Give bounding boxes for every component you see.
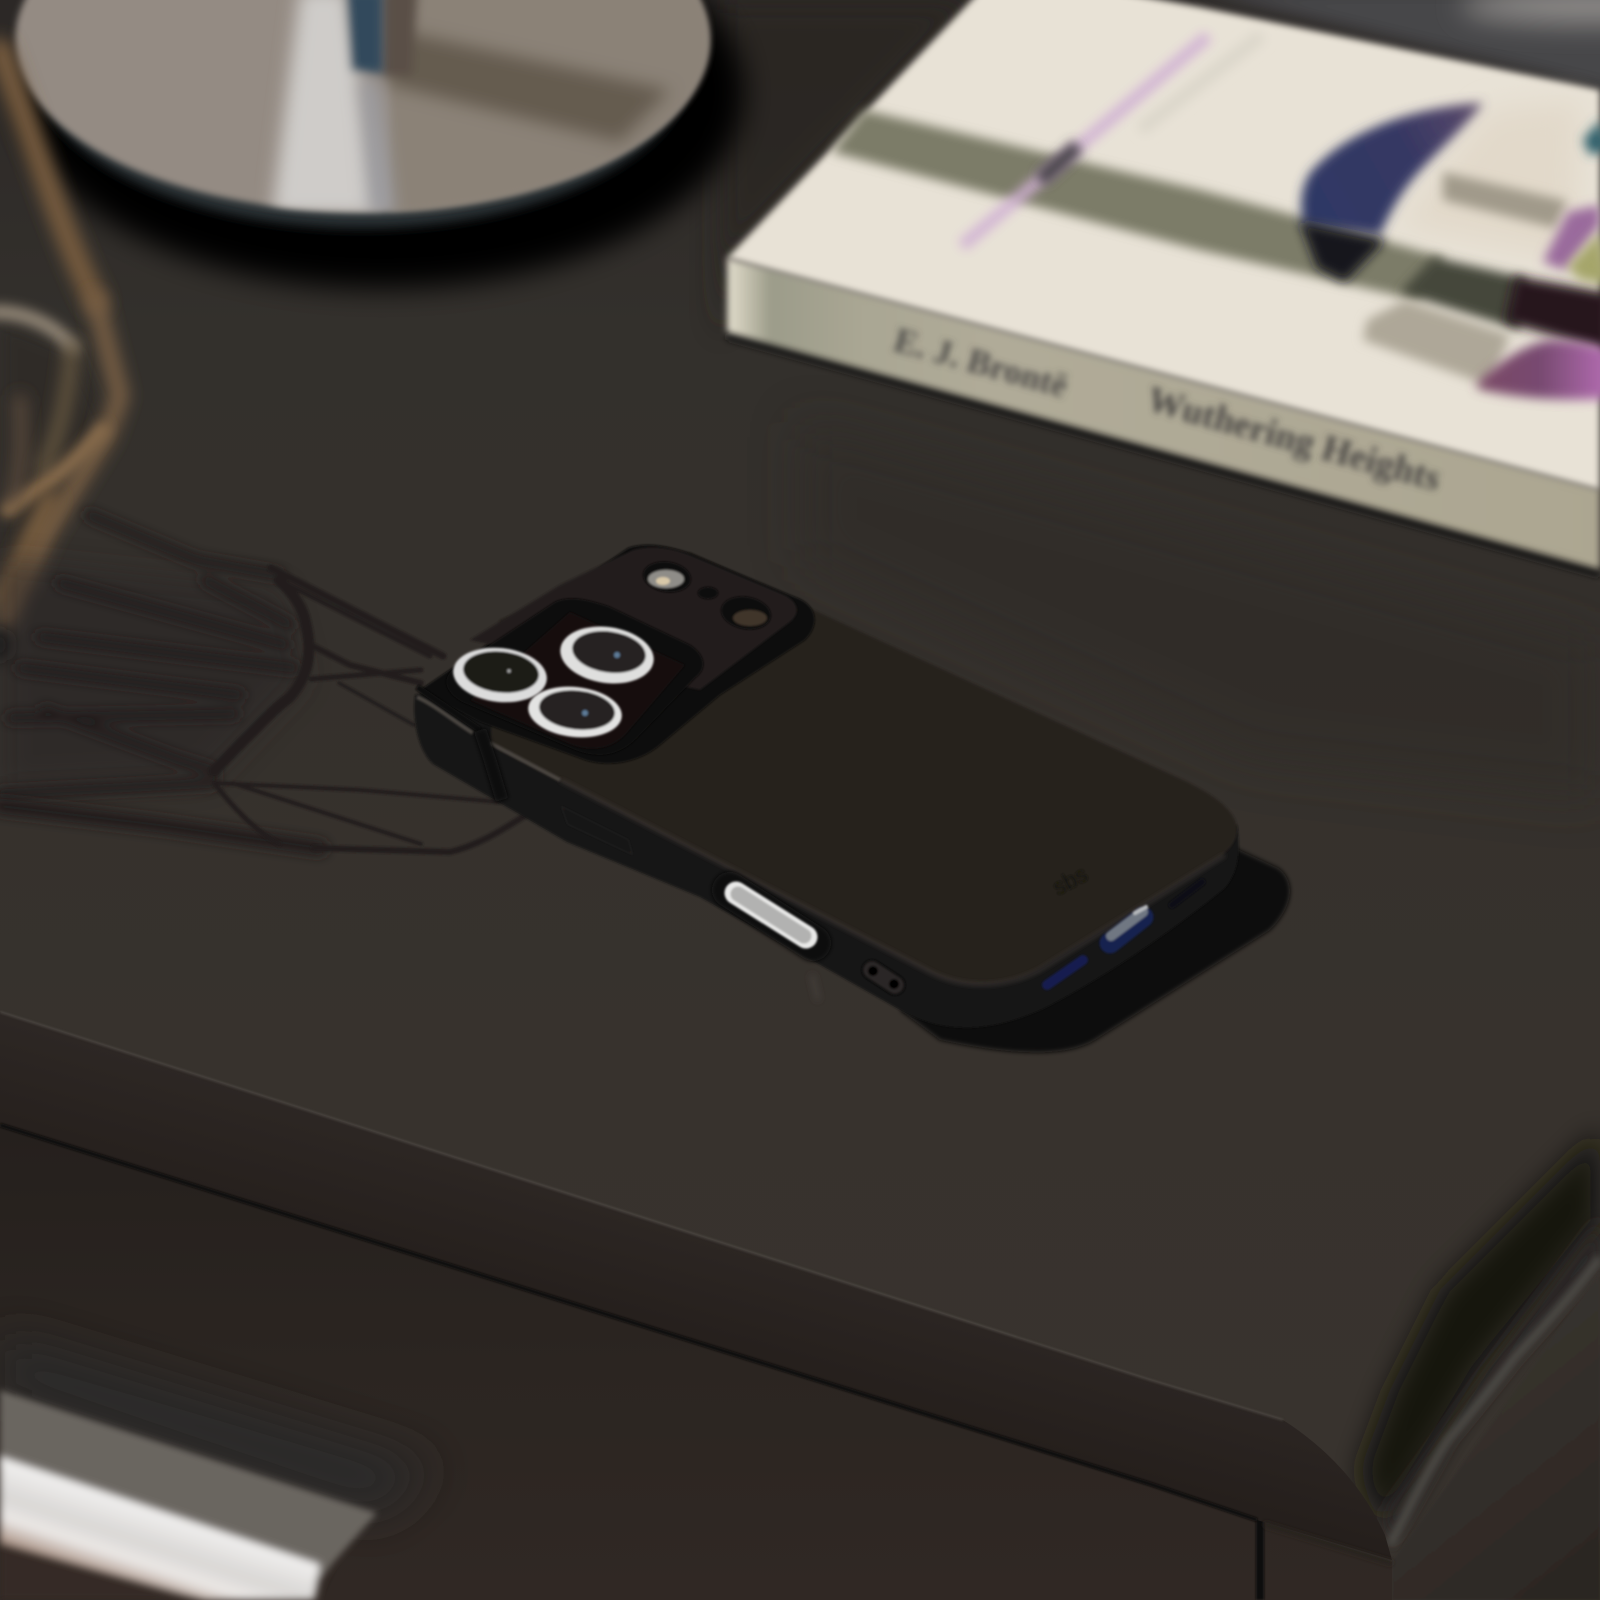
power button recess [730, 890, 813, 943]
wire ornament shadow on desk [0, 515, 529, 852]
cover illustration [1300, 103, 1600, 400]
cover olive band [832, 110, 1445, 300]
dark olive band segment [1400, 257, 1525, 330]
purple cover title [962, 36, 1208, 246]
case logo: sbs [1048, 861, 1092, 900]
lamp base shadow [20, 0, 744, 288]
dark shadow blob [1300, 222, 1385, 282]
SIM and mic holes [868, 966, 899, 989]
lens bottom [526, 682, 624, 742]
top right blurred object [1190, 0, 1600, 92]
volume button [562, 807, 632, 854]
button reflection on desk [812, 975, 818, 1000]
blue port left [1047, 960, 1083, 985]
phone in black case [414, 545, 1239, 1028]
camera recess [446, 599, 703, 755]
power button [736, 893, 806, 937]
faint subtitle [1140, 35, 1262, 130]
warm area of illustration [1400, 100, 1580, 260]
illustration stem [1443, 172, 1567, 228]
bevel lower shadow line [0, 1125, 1257, 1520]
book [727, 0, 1600, 574]
drawer handle [0, 1390, 377, 1600]
desk edge highlight [0, 1012, 1283, 1420]
blurred left rays [0, 515, 295, 794]
USB-C port [1110, 907, 1146, 943]
island top surface [470, 547, 797, 690]
disc bluish rim [32, 0, 692, 228]
small rear lens [719, 593, 773, 633]
lens left [450, 643, 550, 707]
soft tint inside shadow [0, 560, 305, 790]
side top rim highlight [560, 780, 1225, 985]
desk corner mid band [1386, 1218, 1600, 1547]
case back panel [490, 553, 1237, 984]
teal figure part [1583, 120, 1600, 155]
recess inner plate [470, 612, 685, 749]
drawer handle shadow [0, 1335, 433, 1516]
microphone dot [698, 587, 718, 599]
desk front bevel [0, 1012, 1392, 1560]
book spine [727, 258, 1600, 569]
strap shadow across case [417, 687, 480, 730]
drawer front face [0, 1125, 1392, 1600]
spine title text: Wuthering Heights [1143, 379, 1445, 500]
plum shape [1505, 276, 1600, 352]
rim highlight after strap [490, 743, 560, 780]
beige block [1363, 300, 1510, 386]
desk corner bright band [1390, 1258, 1600, 1545]
sharper right strands [214, 568, 529, 852]
flash [641, 559, 693, 595]
island shadow step [420, 545, 815, 764]
lamp base disc [15, 0, 720, 228]
gold wire ornament [0, 50, 120, 661]
phone shadow on desk [900, 848, 1290, 1052]
wire inner shadow [0, 320, 110, 610]
speaker slot [1172, 882, 1202, 905]
disc face [15, 0, 709, 212]
book shadow line [727, 336, 1600, 574]
desk corner dark wedge [1360, 1130, 1600, 1518]
bevel tail line [1264, 1524, 1392, 1563]
spine author text: E. J. Brontë [890, 320, 1072, 405]
bottom heavy strand [0, 806, 320, 848]
purple dome [1477, 340, 1600, 400]
title over band [1040, 146, 1078, 180]
strap shadow on side [480, 730, 502, 800]
lens top right [557, 621, 657, 689]
blue crescent [1301, 103, 1483, 235]
disc reflections [272, 0, 720, 215]
purple sliver [1543, 205, 1600, 270]
drawer gap line [1256, 1519, 1264, 1600]
left rim highlight [417, 697, 473, 733]
green figure part [1567, 232, 1600, 285]
upper camera island [420, 545, 815, 764]
case side wall [414, 690, 1239, 1028]
book top cover [727, 0, 1600, 490]
desk lower right side [1392, 1272, 1600, 1600]
